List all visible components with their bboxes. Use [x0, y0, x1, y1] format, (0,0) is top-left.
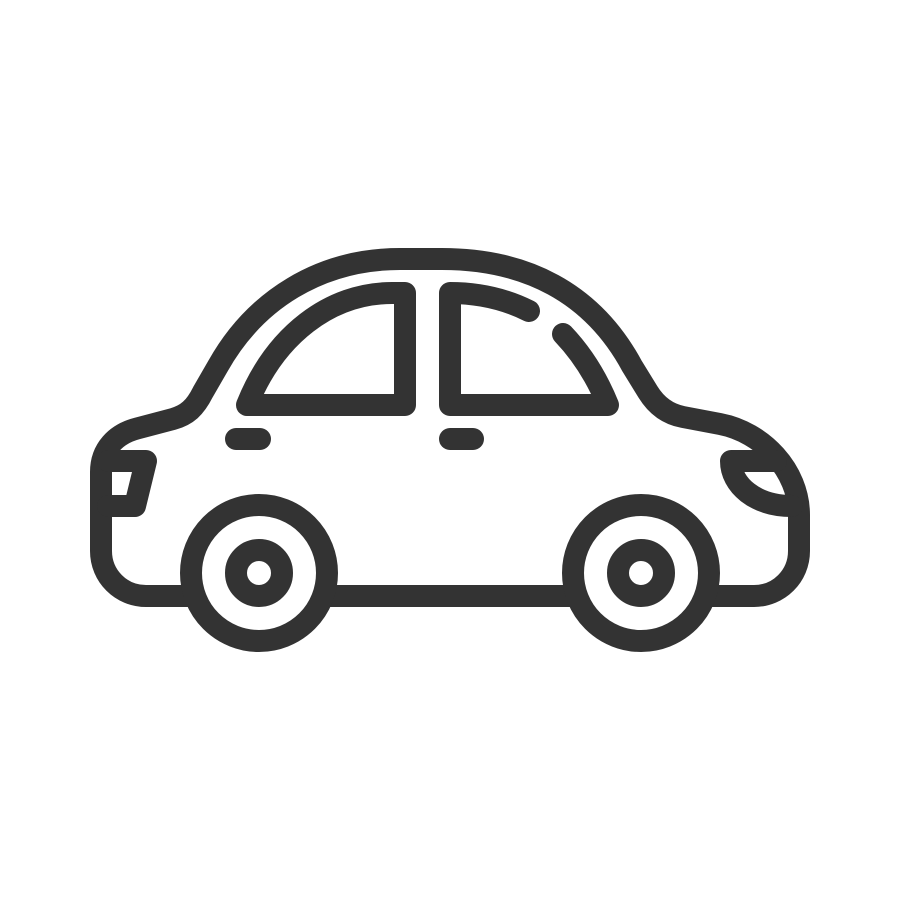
door handle: rear: [450, 428, 473, 450]
right wheel: [573, 505, 709, 641]
rear window: [450, 293, 608, 405]
car body outline: [101, 259, 799, 596]
door handle: front: [236, 428, 260, 450]
left light: [108, 461, 146, 506]
front window: [247, 293, 405, 405]
left wheel: [191, 505, 327, 641]
right light: [731, 461, 792, 506]
